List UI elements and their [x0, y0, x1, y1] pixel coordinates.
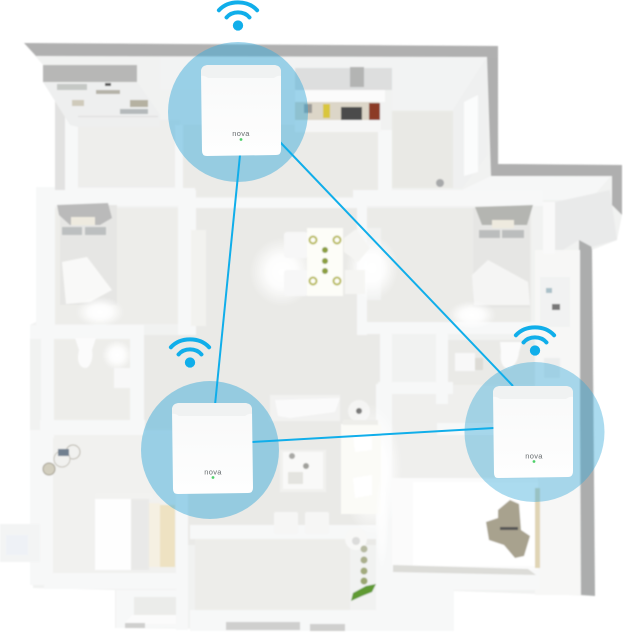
connection: left to right: [252, 428, 494, 442]
right bathroom fixtures: [455, 342, 560, 378]
room: entry floor: [392, 111, 454, 188]
ottomans: [274, 512, 329, 534]
wall: alcove pillar: [543, 202, 555, 254]
router: right: [493, 386, 573, 478]
icon: wifi top: [219, 2, 257, 31]
coffee table: [280, 450, 326, 492]
room: left bathroom floor: [54, 337, 138, 420]
wall: left texture: [55, 100, 65, 190]
plant: [351, 546, 376, 601]
wall: window: [464, 95, 478, 176]
wall: alcove: [555, 190, 617, 255]
room: upper ceiling light area: [160, 57, 487, 110]
status led: [533, 460, 535, 463]
bed cushions: [486, 500, 530, 558]
entry vase: [436, 179, 444, 187]
wall: bottom grey strips: [125, 622, 345, 631]
coverage circle: right: [464, 362, 604, 502]
living room sofa top: [270, 395, 340, 421]
kitchen counter: [295, 67, 392, 132]
room: central dining hall floor: [143, 208, 392, 545]
wall: right terrace: [462, 176, 610, 200]
connection: top to left: [215, 155, 240, 405]
right bedroom bed: [448, 205, 533, 329]
closet: [43, 65, 160, 127]
wall: right upper grey band: [487, 57, 622, 215]
main sofa glowing: [341, 404, 402, 536]
room: left bedroom floor: [55, 208, 179, 324]
round floor lamp: [345, 528, 367, 550]
coverage circle: left: [141, 381, 279, 519]
status led: [240, 138, 242, 141]
logo: nova: nova: [204, 468, 222, 476]
wall: top grey band: [24, 43, 498, 57]
wall: corridor right: [535, 250, 580, 595]
stool: [348, 400, 370, 422]
soft shading: room light: [375, 470, 389, 570]
router: left: [172, 403, 253, 494]
lower right bed: [392, 478, 540, 575]
connection: top to right: [280, 142, 513, 386]
room: right bedroom floor: [366, 208, 531, 325]
wall: right grey band: [579, 240, 595, 596]
icon: wifi left: [171, 339, 209, 368]
room: lower niche: [134, 597, 176, 615]
wall: interior walls: [30, 110, 543, 631]
status led: [212, 476, 214, 479]
wall: niche light: [124, 615, 176, 624]
dining table: [250, 228, 398, 306]
room: bottom balcony floor: [195, 535, 350, 611]
room: closet room floor: [78, 120, 180, 187]
room: right bathroom floor: [448, 340, 538, 400]
lower left bed: [95, 493, 175, 570]
router: top: [201, 65, 281, 156]
shelf corner: [540, 277, 570, 327]
room: lower right bedroom floor: [392, 385, 540, 575]
left wardrobe: [191, 230, 206, 326]
wall: window side: [453, 57, 487, 188]
side table with photos: [43, 445, 80, 475]
coverage circle: top: [168, 42, 308, 182]
room: kitchen floor: [183, 125, 380, 197]
left bedroom bed: [57, 203, 124, 327]
logo: nova: nova: [232, 129, 250, 138]
logo: nova: nova: [525, 452, 543, 460]
icon: wifi right: [516, 327, 554, 356]
room: lower left bedroom floor: [53, 435, 175, 575]
left bathroom fixtures: [75, 338, 132, 388]
annex box: [0, 524, 40, 562]
